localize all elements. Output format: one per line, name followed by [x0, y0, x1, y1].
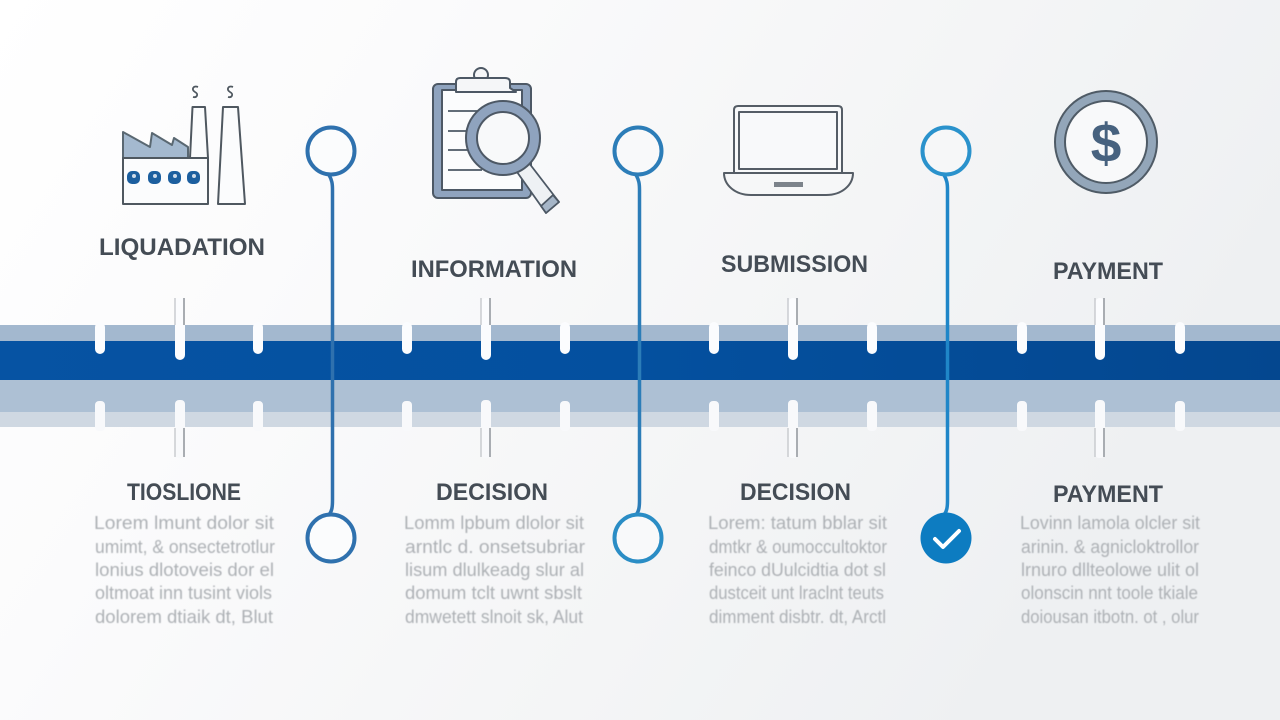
- body: column 4: [1020, 513, 1200, 627]
- body: column 3: dmtkr & oumoccultoktor: [709, 537, 887, 557]
- body: column 4: arinin. & agnicloktrollor: [1021, 537, 1199, 557]
- body: column 2: arntlc d. onsetsubriar: [405, 537, 585, 557]
- body: column 2: domum tclt uwnt sbslt: [405, 583, 582, 603]
- body: column 3: dimment disbtr. dt, Arctl: [709, 607, 886, 627]
- body: column 4: lrnuro dllteolowe ulit ol: [1021, 560, 1199, 580]
- timeline band: [0, 298, 1280, 458]
- body: column 4: doiousan itbotn. ot , olur: [1021, 607, 1199, 627]
- body: column 3: dustceit unt lraclnt teuts: [709, 583, 884, 603]
- column 3 text: [708, 479, 887, 627]
- column 4 text: [1020, 481, 1200, 627]
- body: column 3: feinco dUulcidtia dot sl: [709, 560, 886, 580]
- column 1 text: [94, 479, 275, 627]
- body: column 1: [94, 513, 275, 627]
- body: column 4: Lovinn lamola olcler sit: [1020, 513, 1200, 533]
- body: column 1: lonius dlotoveis dor el: [95, 560, 274, 580]
- connector 1: [308, 128, 354, 562]
- body: column 4: olonscin nnt toole tkiale: [1021, 583, 1198, 603]
- heading: information: INFORMATION: [411, 256, 577, 283]
- heading: column 2: DECISION: [436, 479, 548, 506]
- body: column 2: lisum dlulkeadg slur al: [405, 560, 584, 580]
- connector 3 with check node: [920, 128, 972, 564]
- heading: column 1: TIOSLIONE: [127, 479, 241, 506]
- heading: liquidation: LIQUADATION: [99, 234, 265, 261]
- connector 2: [614, 128, 662, 562]
- body: column 2: [404, 513, 585, 627]
- body: column 1: Lorem lmunt dolor sit: [94, 513, 274, 533]
- body: column 3: [708, 513, 887, 627]
- tick marks, upper: [95, 298, 1185, 360]
- heading: column 4: PAYMENT: [1053, 481, 1163, 508]
- body: column 1: oltmoat inn tusint viols: [95, 583, 272, 603]
- icon: laptop: [724, 106, 853, 195]
- icon: dollar coin: $: [1091, 112, 1121, 174]
- heading: column 3: DECISION: [740, 479, 851, 506]
- column 2 text: [404, 479, 585, 627]
- heading: submission: SUBMISSION: [721, 251, 868, 278]
- body: column 2: Lomm lpbum dlolor sit: [404, 513, 584, 533]
- body: column 1: dolorem dtiaik dt, Blut: [95, 607, 273, 627]
- body: column 3: Lorem: tatum bblar sit: [708, 513, 887, 533]
- icon: dollar coin: [1055, 91, 1157, 193]
- body: column 2: dmwetett slnoit sk, Alut: [405, 607, 583, 627]
- heading: payment: PAYMENT: [1053, 258, 1163, 285]
- body: column 1: umimt, & onsectetrotlur: [95, 537, 275, 557]
- icon: factory: [123, 87, 245, 204]
- tick marks, lower: [95, 400, 1185, 458]
- icon: clipboard and magnifier: [433, 68, 559, 213]
